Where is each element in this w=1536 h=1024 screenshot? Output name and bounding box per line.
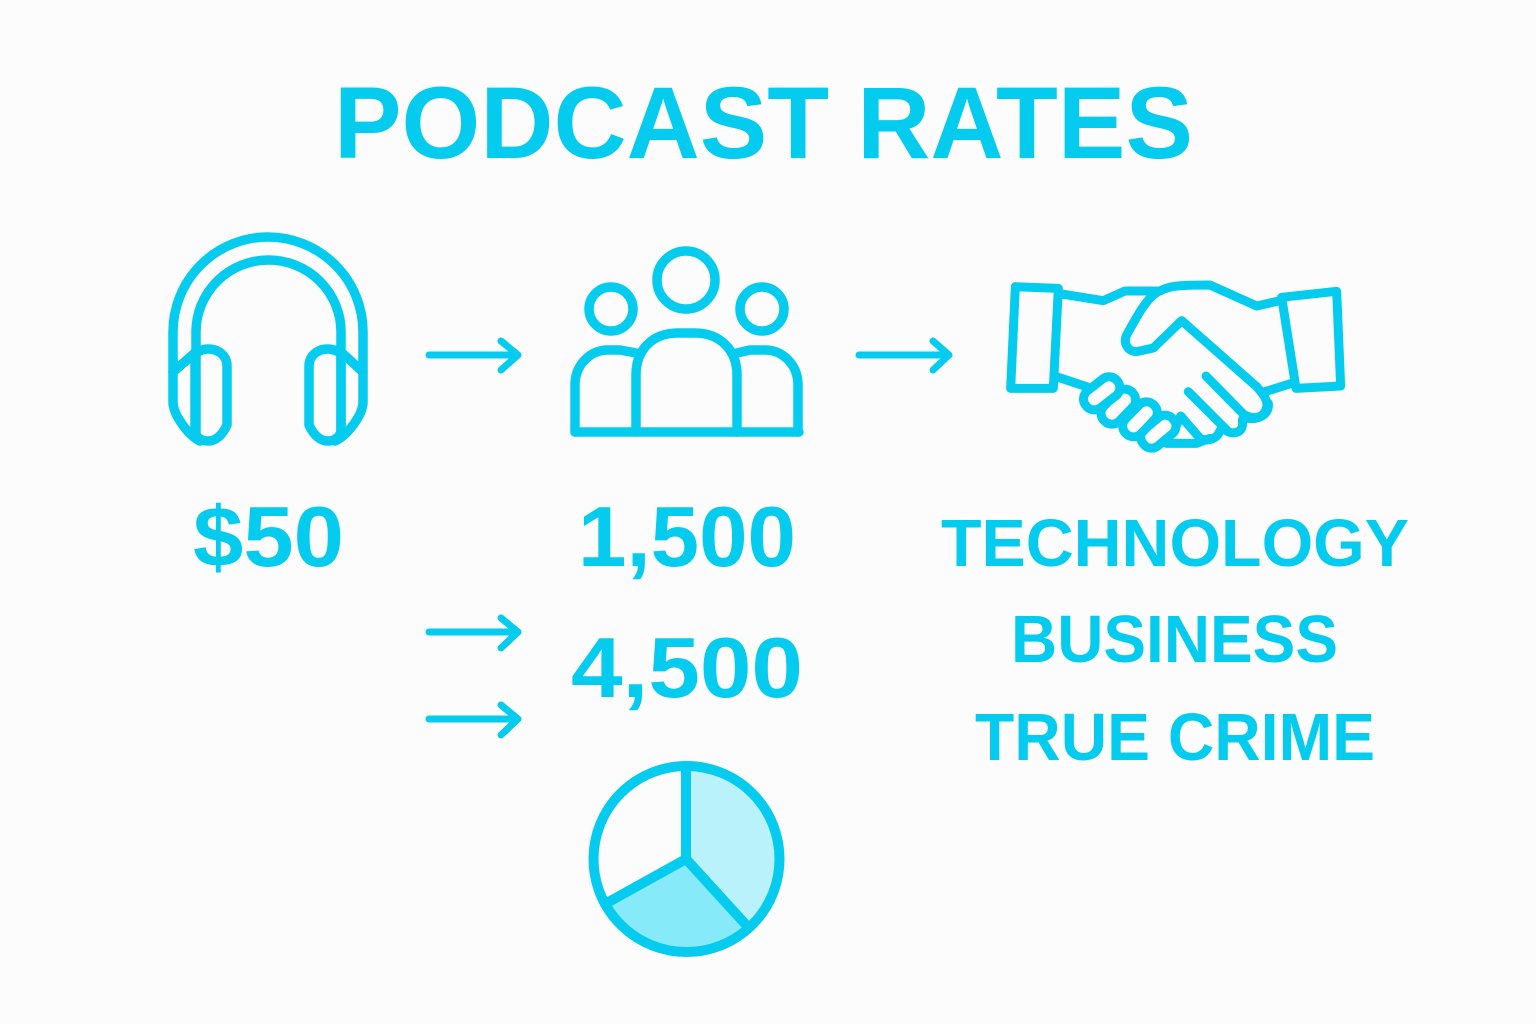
number: 1,500: 1,500 xyxy=(578,490,796,585)
arrow: headphones to audience xyxy=(429,341,518,370)
arrow: to 4,500 upper xyxy=(429,618,518,648)
arrow: audience to sponsor xyxy=(859,341,949,370)
price: $50: $50 xyxy=(193,490,344,585)
arrow: to 4,500 lower xyxy=(429,705,518,735)
icon: handshake xyxy=(1011,285,1341,452)
icon: headphones xyxy=(173,237,363,441)
category: technology: TECHNOLOGY xyxy=(941,506,1409,581)
number: 4,500: 4,500 xyxy=(571,621,803,716)
category: business: BUSINESS xyxy=(1011,602,1338,677)
icon: audience group xyxy=(575,251,799,432)
icon: pie chart xyxy=(594,766,780,952)
category: true crime: TRUE CRIME xyxy=(975,700,1375,775)
title: PODCAST RATES xyxy=(334,66,1193,180)
